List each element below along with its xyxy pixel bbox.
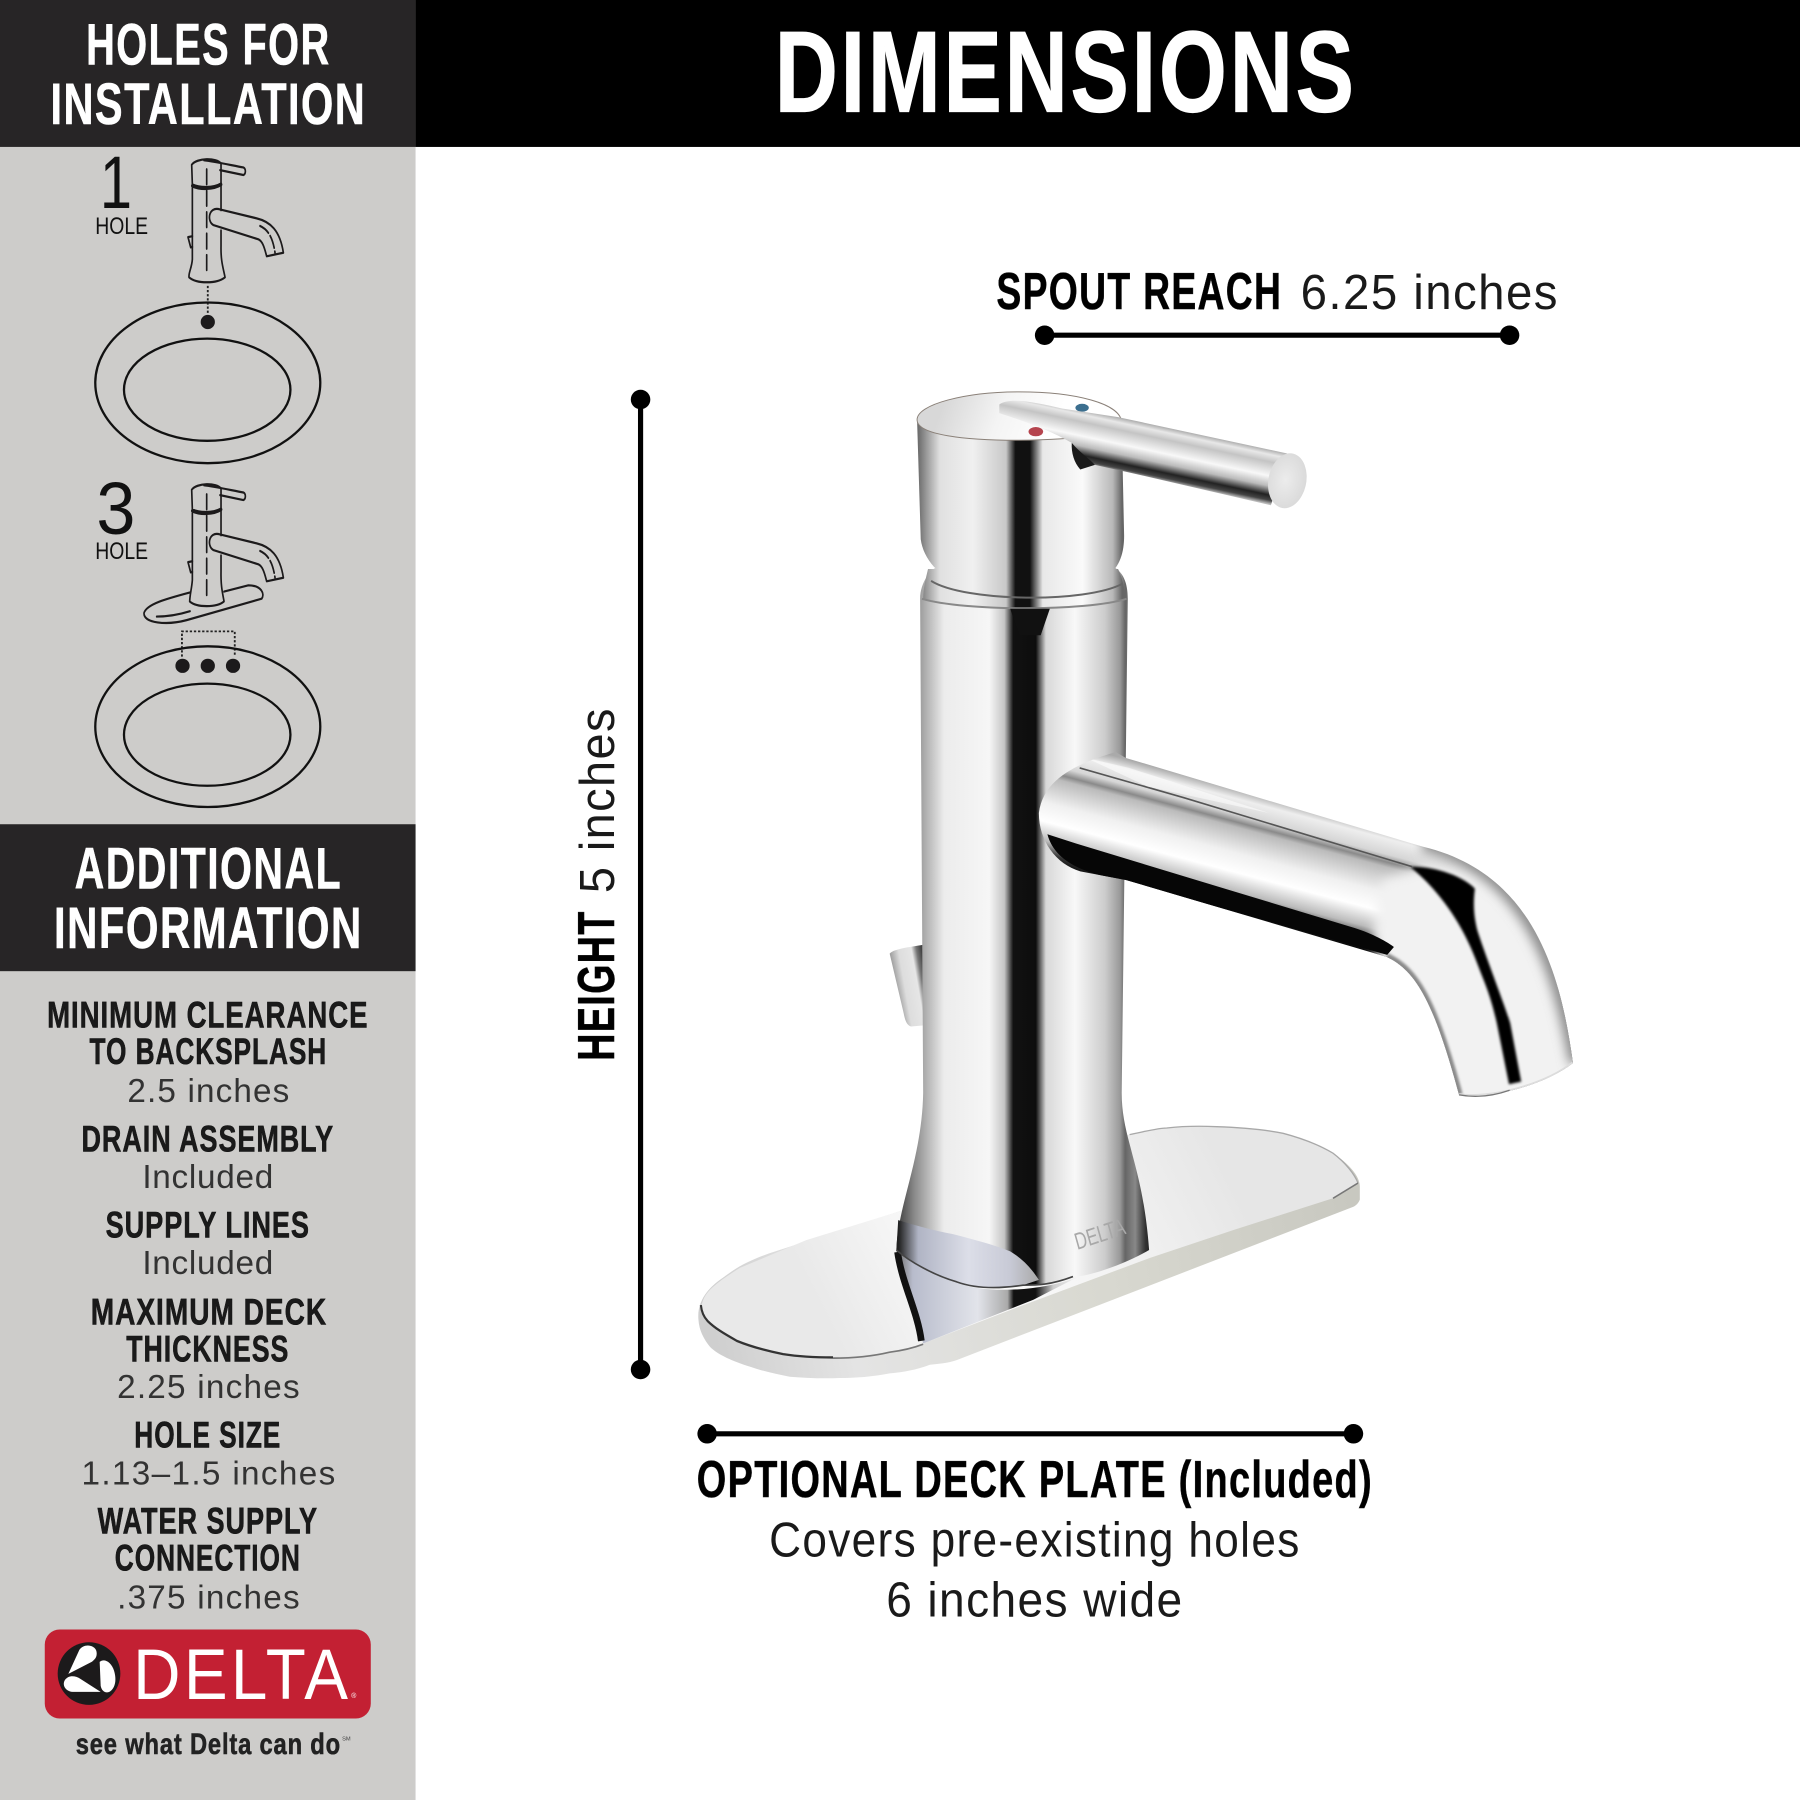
icon: faucet with deck plate line drawing — [144, 484, 283, 623]
top cap — [917, 410, 1124, 590]
heading: additional information: INFORMATION — [54, 896, 363, 961]
spec: maximum deck thickness — [91, 1292, 327, 1406]
spec: drain assembly: Included — [142, 1159, 273, 1196]
spec: supply lines — [106, 1204, 310, 1282]
heading: holes for installation — [0, 0, 416, 147]
icon group: 1 hole installation — [95, 140, 320, 463]
label: 3 hole: 3 — [96, 466, 135, 550]
dimension: height — [567, 390, 650, 1379]
body lip — [922, 569, 1127, 635]
dimension: optional deck plate: OPTIONAL DECK PLATE (Included) — [697, 1450, 1373, 1508]
spec: maximum deck thickness: THICKNESS — [126, 1328, 289, 1369]
dimension: height: HEIGHT — [567, 910, 625, 1061]
arrow: spout reach line — [1035, 325, 1519, 345]
deck plate — [698, 1126, 1360, 1378]
icon: sink with one hole — [95, 302, 320, 463]
heading: additional information: ADDITIONAL — [75, 837, 342, 902]
spec: minimum clearance: MINIMUM CLEARANCE — [47, 994, 368, 1035]
red indicator — [1029, 427, 1043, 436]
dimension: spout reach: 6.25 inches — [1301, 265, 1559, 320]
label: 1 hole — [95, 140, 148, 240]
dimension: spout reach — [996, 262, 1559, 345]
drain lift rod — [890, 944, 926, 1027]
icon: sink with three holes — [95, 646, 320, 807]
dimension: height: 5 inches — [570, 707, 625, 893]
blue indicator — [1075, 404, 1089, 412]
spec: minimum clearance: 2.5 inches — [127, 1073, 289, 1110]
dimension: optional deck plate: Covers pre-existing holes — [769, 1513, 1301, 1568]
arrow: deck plate line — [697, 1424, 1363, 1444]
crease — [1080, 768, 1412, 867]
label: 3 hole: HOLE — [95, 538, 148, 565]
heading: additional information — [0, 824, 416, 971]
label: 3 hole — [95, 466, 148, 565]
dimension: optional deck plate: 6 inches wide — [886, 1572, 1184, 1627]
tagline: see what Delta can do — [76, 1728, 341, 1761]
elbow shading — [1047, 758, 1592, 1113]
dimension: spout reach: SPOUT REACH — [996, 262, 1282, 320]
lower band highlight — [1239, 917, 1336, 946]
logo: delta: ® — [351, 1692, 356, 1700]
plate reflection of base — [896, 1250, 1077, 1344]
icon group: 3 hole installation — [95, 466, 320, 807]
heading: holes for installation: HOLES FOR — [86, 12, 331, 77]
spec: water supply connection: CONNECTION — [115, 1537, 301, 1578]
icon: faucet line drawing — [188, 159, 283, 282]
base contact line — [896, 1250, 1073, 1288]
cap dome — [917, 392, 1122, 440]
icon: delta emblem — [58, 1642, 120, 1705]
spec: maximum deck thickness: MAXIMUM DECK — [91, 1292, 327, 1333]
spec: hole size — [82, 1415, 335, 1492]
label: 1 hole: 1 — [100, 140, 132, 224]
dotted connector — [182, 631, 235, 657]
product image: chrome faucet — [698, 392, 1592, 1378]
heading: holes for installation: INSTALLATION — [51, 72, 366, 137]
spec: minimum clearance — [47, 994, 368, 1110]
spec: hole size: HOLE SIZE — [134, 1415, 281, 1456]
panel: left sidebar — [0, 147, 416, 1800]
lower dark band — [1047, 834, 1394, 955]
body — [896, 567, 1149, 1288]
spout — [1039, 752, 1592, 1113]
base band reflection — [896, 1220, 1039, 1288]
arrow: height line — [631, 390, 650, 1379]
spec: water supply connection: .375 inches — [117, 1579, 300, 1616]
logo: delta — [45, 1630, 371, 1761]
spec: water supply connection — [98, 1501, 318, 1616]
spec: supply lines: Included — [142, 1245, 273, 1282]
engraved brand: DELTA — [1071, 1212, 1129, 1255]
spec: hole size: 1.13–1.5 inches — [82, 1455, 335, 1492]
label: 1 hole: HOLE — [95, 213, 148, 240]
spec: drain assembly — [82, 1118, 334, 1196]
title: dimensions — [416, 0, 1800, 147]
spec: drain assembly: DRAIN ASSEMBLY — [82, 1118, 334, 1159]
lever handle — [999, 401, 1312, 513]
logo: delta: SM — [342, 1736, 351, 1742]
spec: minimum clearance: TO BACKSPLASH — [90, 1031, 327, 1072]
spec: maximum deck thickness: 2.25 inches — [117, 1369, 300, 1406]
title: dimensions: DIMENSIONS — [775, 8, 1357, 136]
logo: delta: DELTA — [133, 1636, 351, 1715]
dotted connector — [207, 286, 209, 313]
spec: supply lines: SUPPLY LINES — [106, 1204, 310, 1245]
text block: additional information list — [47, 994, 368, 1616]
dimension: optional deck plate — [697, 1424, 1373, 1627]
spec: water supply connection: WATER SUPPLY — [98, 1501, 318, 1542]
